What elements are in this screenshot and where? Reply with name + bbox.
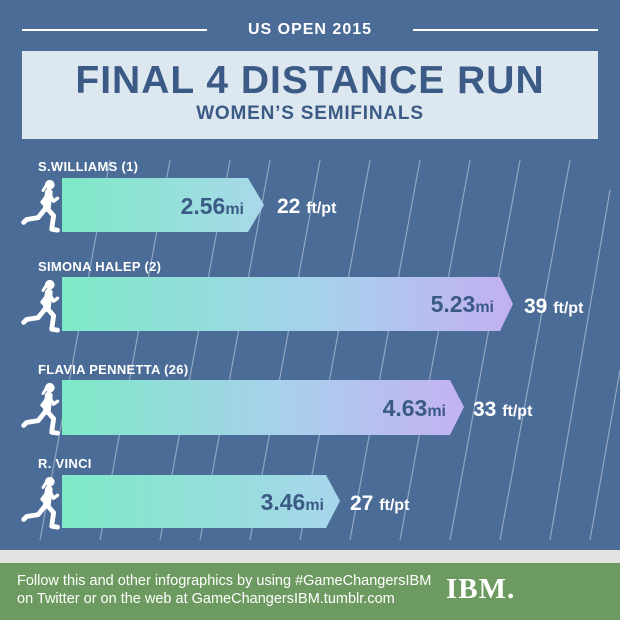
row 3: Flavia Pennetta: 4.63mi	[383, 395, 446, 421]
row 1: S.Williams: 22 ft/pt	[277, 195, 336, 218]
row 2: Simona Halep: SIMONA HALEP (2)	[38, 259, 161, 274]
footer	[0, 563, 620, 620]
row 4: R. Vinci: 3.46mi	[261, 489, 324, 515]
row 1: S.Williams: 2.56mi	[181, 193, 244, 219]
row 1: S.Williams: S.WILLIAMS (1)	[38, 159, 138, 174]
row 4: R. Vinci: 27 ft/pt	[350, 492, 409, 515]
IBM logo: IBM.	[446, 573, 515, 605]
footer text	[17, 573, 431, 607]
header: US OPEN 2015: US OPEN 2015	[248, 21, 372, 38]
title box	[22, 51, 598, 139]
footer text: on Twitter or on the web at GameChangersIBM.tumblr.com	[17, 591, 395, 607]
row 2: Simona Halep: 5.23mi	[431, 291, 494, 317]
subtitle: WOMEN’S SEMIFINALS	[196, 103, 424, 124]
row 1: S.Williams	[21, 159, 336, 233]
row 3: Flavia Pennetta: FLAVIA PENNETTA (26)	[38, 362, 188, 377]
footer text: Follow this and other infographics by using #GameChangersIBM	[17, 573, 431, 589]
row 3: Flavia Pennetta	[21, 362, 532, 436]
row 2: Simona Halep: 39 ft/pt	[524, 295, 583, 318]
row 4: R. Vinci	[21, 456, 410, 530]
row 3: Flavia Pennetta: 33 ft/pt	[473, 398, 532, 421]
row 4: R. Vinci: R. VINCI	[38, 456, 92, 471]
bar	[62, 178, 264, 232]
row 2: Simona Halep	[21, 259, 584, 333]
title: FINAL 4 DISTANCE RUN	[75, 59, 545, 102]
